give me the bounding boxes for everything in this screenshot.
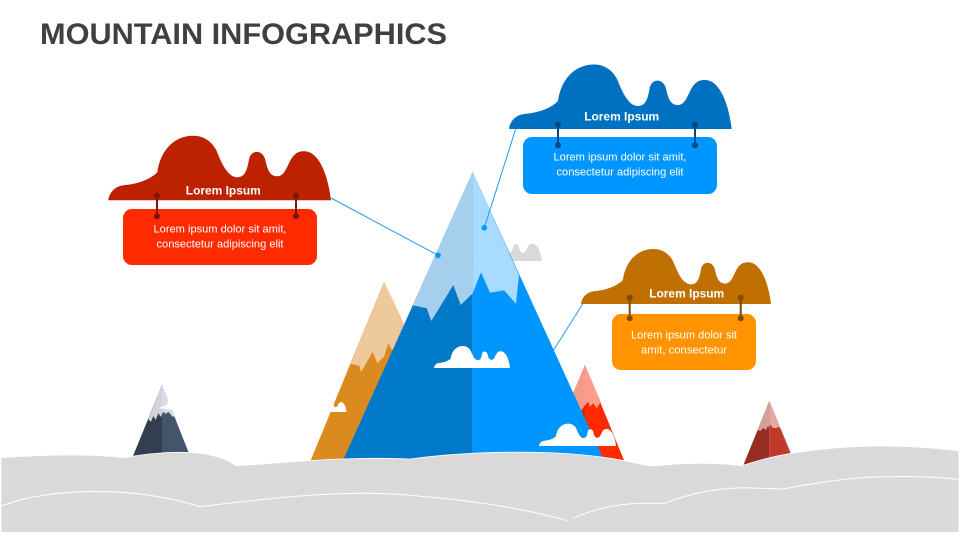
connector line: red callout: [331, 198, 438, 255]
text box: [123, 209, 317, 265]
connector line: blue callout: [484, 129, 516, 228]
small dark mountain: [133, 385, 190, 456]
hanger left: [154, 193, 160, 219]
red mountain: [540, 365, 628, 472]
heading: Lorem Ipsum: [649, 287, 724, 301]
snow cap right: [473, 172, 519, 304]
text box: [612, 314, 756, 370]
snow cap left: [413, 172, 473, 321]
panel: orange callout: [581, 249, 771, 370]
body text: Lorem ipsum dolor sit amit,: [554, 152, 686, 164]
cloud header: [581, 249, 771, 304]
title: MOUNTAIN INFOGRAPHICS: [40, 18, 447, 51]
connector line: orange callout: [553, 304, 583, 351]
cloud header: [509, 64, 732, 129]
snowy ground: [1, 446, 959, 532]
icon: white cloud on main mountain: [434, 346, 510, 368]
anchor dot: red callout: [435, 252, 441, 258]
hanger left: [555, 122, 561, 148]
anchor dot: blue callout: [482, 225, 487, 230]
icon: grey cloud behind main mountain: [464, 238, 542, 261]
hanger left: [627, 295, 633, 321]
body text: consectetur adipiscing elit: [556, 167, 684, 179]
body text: [154, 224, 286, 251]
main blue mountain: [340, 172, 607, 467]
body text: [554, 152, 686, 179]
icon: white cloud on orange mountain: [302, 399, 347, 412]
text box: [523, 137, 717, 194]
hanger right: [293, 193, 299, 219]
icon: white cloud at mountain foot: [539, 424, 616, 446]
body text: Lorem ipsum dolor sit: [631, 330, 737, 342]
heading: Lorem Ipsum: [584, 110, 659, 124]
body text: [631, 330, 737, 357]
body text: consectetur adipiscing elit: [156, 239, 284, 251]
hanger right: [692, 122, 698, 148]
hanger right: [738, 295, 744, 321]
small red mountain: [743, 401, 796, 466]
body text: Lorem ipsum dolor sit amit,: [154, 224, 286, 236]
body text: amit, consectetur: [641, 345, 727, 357]
panel: blue callout: [509, 64, 732, 194]
orange mountain: [302, 282, 440, 467]
panel: red callout: [108, 136, 331, 265]
cloud header: [108, 136, 331, 200]
heading: Lorem Ipsum: [186, 184, 261, 198]
